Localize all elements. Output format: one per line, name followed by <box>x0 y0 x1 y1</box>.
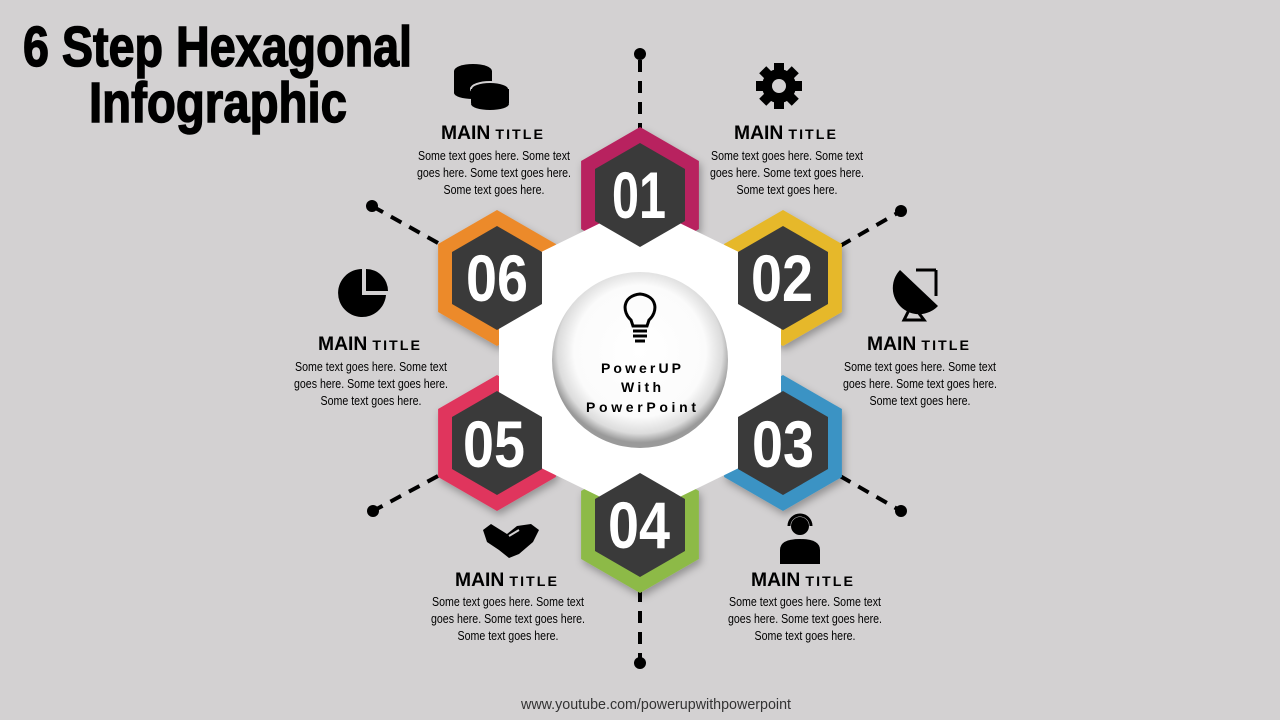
text block: bottom left: Some text goes here. Some text <box>432 594 584 609</box>
text block: left <box>294 334 448 408</box>
text block: bottom right: goes here. Some text goes here. <box>728 611 882 626</box>
icon: gear <box>756 63 802 109</box>
center label: PowerUP <box>601 360 681 376</box>
text block: bottom left: Some text goes here. <box>458 628 558 643</box>
text block: bottom right: Some text goes here. <box>754 628 856 643</box>
text block: step 01: Some text goes here. Some text <box>418 148 570 163</box>
text block: step 02 top: MAIN TITLE <box>734 123 838 144</box>
center label: PowerPoint <box>586 399 696 415</box>
colored hex borders <box>438 127 842 593</box>
step numbers: 06 <box>466 241 528 315</box>
text block: left: goes here. Some text goes here. <box>294 376 448 391</box>
text block: bottom right <box>728 570 882 643</box>
center circle <box>552 272 728 448</box>
text block: right: MAIN TITLE <box>867 334 971 355</box>
text block: bottom right: MAIN TITLE <box>751 570 855 591</box>
dark hexes <box>452 143 828 577</box>
text block: step 02 top: Some text goes here. <box>736 182 838 197</box>
step numbers: 03 <box>752 407 814 481</box>
step numbers <box>463 158 814 562</box>
text block: step 01 <box>417 123 571 197</box>
text block: bottom left <box>431 570 585 643</box>
text block: step 01: goes here. Some text goes here. <box>417 165 571 180</box>
center label: With <box>621 379 661 395</box>
step numbers: 02 <box>751 241 813 315</box>
step numbers: 04 <box>608 488 670 562</box>
text block: bottom left: goes here. Some text goes here. <box>431 611 585 626</box>
step numbers: 05 <box>463 407 525 481</box>
center label <box>586 360 696 415</box>
icon: satellite dish <box>893 270 938 320</box>
text block: bottom left: MAIN TITLE <box>455 570 559 591</box>
connector lines <box>372 60 901 660</box>
step numbers: 01 <box>612 158 666 232</box>
icon: light bulb <box>625 294 655 341</box>
text block: right: Some text goes here. Some text <box>844 359 996 374</box>
text block: step 01: Some text goes here. <box>444 182 544 197</box>
text block: step 02 top: goes here. Some text goes here. <box>710 165 864 180</box>
icon: coins <box>454 64 509 110</box>
white central gear shape <box>499 222 781 498</box>
text block: right <box>843 334 997 408</box>
text block: bottom right: Some text goes here. Some text <box>729 594 881 609</box>
text block: left: MAIN TITLE <box>318 334 422 355</box>
title <box>23 15 412 135</box>
text block: step 02 top: Some text goes here. Some text <box>711 148 863 163</box>
text block: left: Some text goes here. <box>320 393 422 408</box>
title: 6 Step Hexagonal <box>23 15 412 79</box>
connector dots <box>366 48 907 669</box>
icon: headset person <box>780 515 820 564</box>
text block: left: Some text goes here. Some text <box>295 359 447 374</box>
text block: right: goes here. Some text goes here. <box>843 376 997 391</box>
icon: pie chart <box>338 269 388 317</box>
text block: right: Some text goes here. <box>870 393 970 408</box>
icon: handshake <box>483 524 539 558</box>
footer url: www.youtube.com/powerupwithpowerpoint <box>520 696 792 713</box>
title: Infographic <box>89 71 347 135</box>
text block: step 02 top <box>710 123 864 197</box>
text block: step 01: MAIN TITLE <box>441 123 545 144</box>
